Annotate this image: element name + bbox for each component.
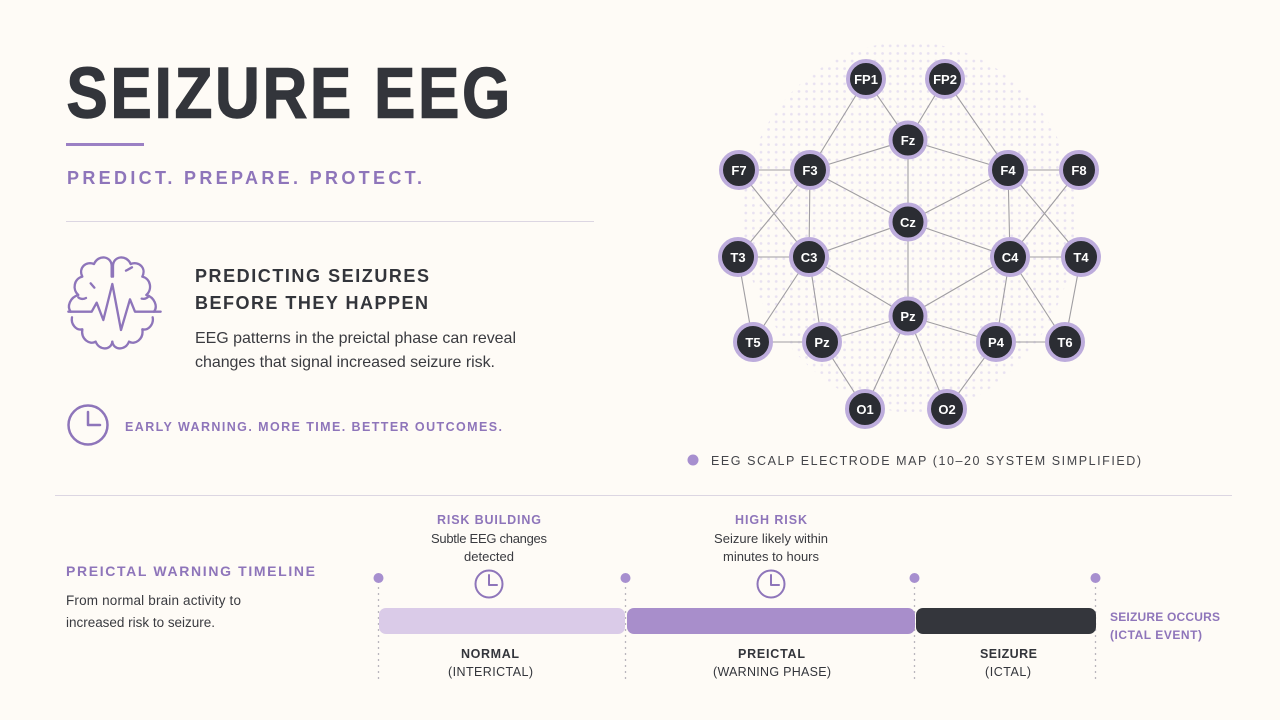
timeline description: [66, 593, 241, 630]
electrode Fz: [890, 122, 926, 158]
electrode Fz: Fz: [901, 133, 916, 148]
heading: predicting seizures: [195, 266, 429, 313]
electrode T5: T5: [745, 335, 761, 350]
electrode FP1: FP1: [854, 72, 878, 87]
map legend: EEG SCALP ELECTRODE MAP (10–20 SYSTEM SIMPLIFIED): [711, 454, 1141, 468]
high risk label: HIGH RISK: [735, 513, 807, 527]
electrode Pz center: Pz: [900, 309, 916, 324]
timeline bar: normal: [379, 608, 625, 634]
phase label: normal: [448, 647, 533, 679]
electrode Pz center: [890, 298, 926, 334]
icon: risk building clock: [476, 570, 502, 598]
electrode T6: [1047, 324, 1083, 360]
electrode C3: [791, 239, 827, 275]
dot pattern head shape: [742, 42, 1076, 413]
electrode C4: [992, 239, 1028, 275]
electrode FP1: [848, 61, 884, 97]
electrode C3: C3: [801, 250, 817, 265]
timeline bar: seizure: [916, 608, 1096, 634]
body text: EEG patterns in the preictal phase can reveal: [195, 330, 516, 347]
timeline description: increased risk to seizure.: [66, 615, 215, 630]
phase label: preictal: [713, 647, 831, 679]
risk building label: [431, 513, 548, 564]
electrode O2: O2: [938, 402, 956, 417]
title accent rule: [66, 143, 144, 146]
icon: brain with EEG trace: [68, 257, 161, 348]
timeline heading: PREICTAL WARNING TIMELINE: [66, 563, 315, 579]
title: SEIZURE EEG: [66, 55, 510, 134]
risk building label: detected: [464, 549, 514, 564]
electrode Cz: Cz: [900, 215, 916, 230]
high risk label: Seizure likely within: [714, 531, 828, 546]
high risk label: minutes to hours: [723, 549, 820, 564]
electrode F8: F8: [1071, 163, 1087, 178]
risk building label: Subtle EEG changes: [431, 531, 548, 546]
icon: clock: [68, 406, 108, 444]
heading: predicting seizures: BEFORE THEY HAPPEN: [195, 293, 428, 313]
timeline markers: [374, 573, 1100, 682]
timeline bar: preictal: [627, 608, 915, 634]
electrode T4: T4: [1073, 250, 1089, 265]
electrode O2: [929, 391, 965, 427]
seizure occurs callout: [1110, 610, 1220, 642]
seizure occurs callout: (ICTAL EVENT): [1110, 628, 1202, 642]
electrode T5: [735, 324, 771, 360]
electrode O1: [847, 391, 883, 427]
phase label: seizure: [980, 647, 1037, 679]
electrode T6: T6: [1057, 335, 1073, 350]
electrode T3: T3: [730, 250, 746, 265]
electrode F8: [1061, 152, 1097, 188]
high risk label: [714, 513, 828, 564]
electrode T4: [1063, 239, 1099, 275]
early warning callout: EARLY WARNING. MORE TIME. BETTER OUTCOMES.: [125, 420, 502, 434]
electrode Cz: [890, 204, 926, 240]
phase label: preictal: PREICTAL: [738, 647, 805, 661]
tagline: PREDICT. PREPARE. PROTECT.: [67, 168, 422, 188]
electrode F4: [990, 152, 1026, 188]
electrode FP2: FP2: [933, 72, 957, 87]
phase label: normal: (INTERICTAL): [448, 665, 533, 679]
electrode O1: O1: [856, 402, 874, 417]
icon: high risk clock: [758, 570, 784, 598]
seizure occurs callout: SEIZURE OCCURS: [1110, 610, 1220, 624]
phase label: seizure: (ICTAL): [985, 665, 1031, 679]
electrode T3: [720, 239, 756, 275]
body text: changes that signal increased seizure risk.: [195, 354, 495, 371]
electrode P4: P4: [988, 335, 1005, 350]
electrode FP2: [927, 61, 963, 97]
phase label: seizure: SEIZURE: [980, 647, 1037, 661]
electrode C4: C4: [1002, 250, 1019, 265]
electrode F3: F3: [802, 163, 818, 178]
electrode F7: [721, 152, 757, 188]
timeline description: From normal brain activity to: [66, 593, 241, 608]
electrode P4: [978, 324, 1014, 360]
electrode F7: F7: [731, 163, 747, 178]
electrode Pz left: Pz: [814, 335, 830, 350]
electrode F4: F4: [1000, 163, 1016, 178]
phase label: normal: NORMAL: [461, 647, 519, 661]
risk building label: RISK BUILDING: [437, 513, 541, 527]
body text: [195, 330, 516, 371]
electrode connections: [738, 79, 1081, 409]
heading: predicting seizures: PREDICTING SEIZURES: [195, 266, 429, 286]
electrode F3: [792, 152, 828, 188]
electrode Pz left: [804, 324, 840, 360]
phase label: preictal: (WARNING PHASE): [713, 665, 831, 679]
